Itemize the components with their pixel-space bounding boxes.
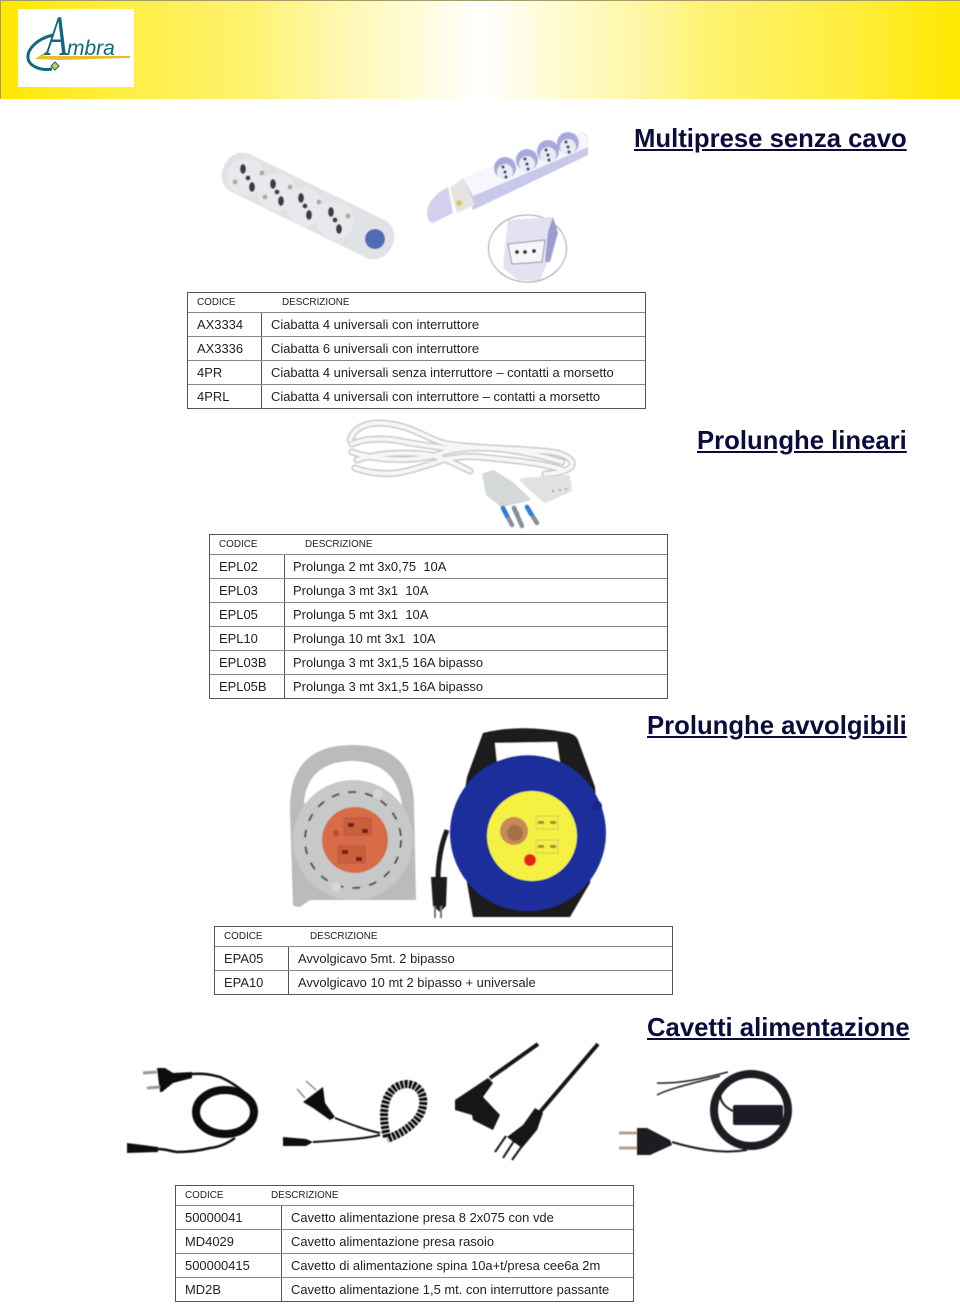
table: Prolunghe lineari: EPL03 [219,583,258,598]
table: Prolunghe lineari: CODICE [219,539,257,550]
heading: Prolunghe avvolgibili: Prolunghe avvolgibili [647,712,907,740]
table: Cavetti alimentazione [175,1185,634,1302]
heading: Cavetti alimentazione: Cavetti alimentazione [647,1014,910,1042]
table: Prolunghe lineari: Prolunga 10 mt 3x1 10A [293,631,436,646]
table: Cavetti alimentazione: 500000415 [185,1258,250,1273]
table: Prolunghe lineari: EPL05 [219,607,258,622]
photo: white four-socket strip [215,146,401,266]
table: Prolunghe lineari: Prolunga 5 mt 3x1 10A [293,607,428,622]
table: Prolunghe lineari: Prolunga 2 mt 3x0,75 10A [293,559,446,574]
header band [0,0,960,99]
logo artwork: mbra [67,37,115,60]
table: Multiprese: 4PRL [197,389,229,404]
table: Multiprese: 4PR [197,365,222,380]
table: Cavetti alimentazione: DESCRIZIONE [271,1190,338,1201]
table: Multiprese: Ciabatta 4 universali senza interruttore – contatti a morsetto [271,365,614,380]
table: Prolunghe lineari: EPL03B [219,655,267,670]
table: Multiprese: CODICE [197,297,235,308]
table: Prolunghe avvolgibili: CODICE [224,931,262,942]
table: Prolunghe lineari [209,534,668,699]
logo box [18,9,134,87]
table: Prolunghe avvolgibili: EPA05 [224,951,263,966]
icon: cord socket end and plug [484,472,570,526]
photo: black cable with inline switch [619,1072,788,1155]
photo: black cables with angled connector and Italian plug [455,1044,598,1160]
table: Cavetti alimentazione: Cavetto alimentazione 1,5 mt. con interruttore passante [291,1282,609,1297]
table: Prolunghe avvolgibili: EPA10 [224,975,263,990]
table: Prolunghe lineari: Prolunga 3 mt 3x1,5 16A bipasso [293,679,483,694]
table: Multiprese: Ciabatta 4 universali con interruttore [271,317,479,332]
photo: grey cable reel [290,745,416,907]
table: Multiprese: DESCRIZIONE [282,297,350,308]
table: Cavetti alimentazione: Cavetto di alimentazione spina 10a+t/presa cee6a 2m [291,1258,600,1273]
table: Cavetti alimentazione: 50000041 [185,1210,243,1225]
table: Multiprese: AX3334 [197,317,243,332]
table: Cavetti alimentazione: Cavetto alimentazione presa 8 2x075 con vde [291,1210,554,1225]
logo artwork [26,9,130,71]
photo: lilac four-socket strip [427,132,588,223]
table: Cavetti alimentazione: MD2B [185,1282,221,1297]
photo: white extension cord [350,423,572,474]
table: Cavetti alimentazione: CODICE [185,1190,223,1201]
table: Multiprese [187,292,646,409]
table: Multiprese: AX3336 [197,341,243,356]
photo: plug detail inset [488,215,566,282]
table: Prolunghe avvolgibili: Avvolgicavo 10 mt 2 bipasso + universale [298,975,536,990]
table: Prolunghe lineari: EPL10 [219,631,258,646]
table: Cavetti alimentazione: MD4029 [185,1234,234,1249]
table: Prolunghe avvolgibili [214,926,673,995]
table: Prolunghe lineari: Prolunga 3 mt 3x1 10A [293,583,428,598]
heading: Multiprese senza cavo: Multiprese senza cavo [634,125,907,153]
photo: black coiled cable [283,1081,423,1146]
table: Prolunghe lineari: DESCRIZIONE [305,539,372,550]
heading: Prolunghe lineari: Prolunghe lineari [697,427,907,455]
table: Multiprese: Ciabatta 6 universali con interruttore [271,341,479,356]
photo: blue cable reel [431,728,606,918]
photo: black cable coil [127,1068,254,1153]
table: Multiprese: Ciabatta 4 universali con interruttore – contatti a morsetto [271,389,600,404]
table: Cavetti alimentazione: Cavetto alimentazione presa rasoio [291,1234,494,1249]
table: Prolunghe lineari: EPL05B [219,679,267,694]
table: Prolunghe lineari: Prolunga 3 mt 3x1,5 16A bipasso [293,655,483,670]
table: Prolunghe avvolgibili: Avvolgicavo 5mt. 2 bipasso [298,951,455,966]
table: Prolunghe avvolgibili: DESCRIZIONE [310,931,378,942]
table: Prolunghe lineari: EPL02 [219,559,258,574]
